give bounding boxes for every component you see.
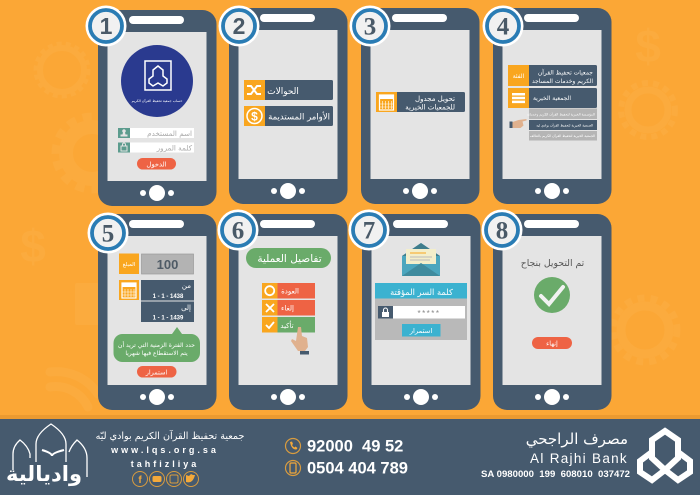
charity logo: واديالية [6,462,82,486]
badge 4: 4 [497,14,510,40]
amount row: 100 [157,257,178,272]
phone 3: scheduled transfer [361,8,480,204]
transfers menu item: الحوالات [267,87,299,97]
charity logo [6,424,87,486]
badge 7 [348,210,390,250]
badge 3: 3 [364,14,376,40]
password field: كلمة المرور [156,144,193,152]
badge 5 [88,212,128,254]
badge 7: 7 [363,218,375,244]
phone 1: login [98,10,216,206]
category row [508,65,597,86]
bank name and IBAN: Al Rajhi Bank [530,451,628,466]
phone numbers: 0504 404 789 [307,460,408,478]
badge 1 [86,6,126,46]
finish button [532,337,572,349]
OTP header [375,283,467,298]
charity name and handles: جمعية تحفيظ القرآن الكريم بوادي ليّه [96,429,244,442]
infographic canvas: $ [20,220,46,272]
social icons: f [138,475,142,486]
footer band [0,419,700,495]
bank logo circle: حساب جمعية تحفيظ القرآن الكريم [132,99,182,103]
phone 7: one-time password [362,214,480,410]
charity options list [527,108,597,140]
confirm option [262,317,315,332]
badge 6: 6 [232,218,244,244]
username field [118,128,194,138]
date range: 1 - 1 - 1438 [153,294,184,300]
bank name and IBAN [481,430,630,480]
login button: الدخول [146,160,167,168]
charity options list: الجمعية الخيرية لتحفيظ القرآن الكريم بالطائف [530,134,595,138]
details heading pill [246,248,331,268]
hint bubble: يتم الاستقطاع فيها شهريا [125,350,188,357]
standing orders menu item [244,106,333,126]
badge 5: 5 [102,220,114,248]
password field [118,142,194,152]
details heading pill: تفاصيل العملية [257,253,322,265]
date range: 1 - 1 - 1439 [153,316,184,322]
success message: تم التحويل بنجاح [521,258,585,269]
envelope icon [402,243,440,276]
continue button: استمرار [145,368,167,376]
badge 2: 2 [233,13,245,39]
OTP form panel: ***** [417,309,441,318]
tapping hand icon [291,327,309,354]
bank logo circle [121,45,193,117]
amount row [119,254,194,274]
category row: الكريم وخدمات المساجد [532,78,593,85]
standing orders menu item: الأوامر المستديمة [268,112,330,122]
social icons [132,472,198,486]
finish button: إنهاء [546,340,558,348]
charity options list: المؤسسة الخيرية لتحفيظ القرآن الكريم وخدماته [527,112,595,116]
charity name and handles: tahfizliya [131,459,199,469]
login button [137,158,176,170]
scheduled transfer item: للجمعيات الخيرية [405,104,455,112]
transfers menu item [244,80,333,100]
charity options list: الجمعية الخيرية لتحفيظ القرآن بوادي ليه [536,124,593,128]
standing orders menu item: $ [251,110,258,124]
phone numbers: 92000 49 52 [307,438,403,456]
back option: العودة [281,288,299,296]
username field: اسم المستخدم [147,129,192,138]
phone 4: charity selection [493,8,612,204]
Al Rajhi Bank logo [640,431,690,480]
charity name and handles [96,429,244,469]
hint bubble [114,327,200,362]
success check icon [534,277,570,313]
hint bubble: حدد الفترة الزمنية التي تريد أن [118,341,195,349]
badge 8: 8 [496,218,508,244]
confirm option: تأكيد [280,320,294,330]
badge 8 [482,210,522,250]
OTP header: كلمة السر المؤقتة [390,287,453,297]
scheduled transfer item: تحويل مجدول [415,95,455,103]
phone 8: success [493,214,612,410]
date range: إلى [181,304,191,312]
date range [119,280,194,322]
badge 3 [350,6,390,46]
continue button [137,366,176,378]
scheduled transfer item [376,92,465,112]
pointing hand icon [510,119,526,128]
badge 2 [218,6,260,46]
amount row: المبلغ [123,262,136,268]
cancel option [262,300,315,316]
phone 5: amount and period [98,214,216,410]
phone numbers [286,438,408,478]
badge 6 [218,210,258,250]
OTP form panel: استمرار [409,327,432,335]
decorative background icons [36,44,677,407]
bank name and IBAN: مصرف الراجحي [526,430,628,449]
infographic canvas: $ [635,20,661,72]
charity row: الجمعية الخيرية [533,95,571,102]
category row: الفئة [513,73,525,80]
badge 1: 1 [100,13,113,39]
OTP form panel [375,298,467,340]
charity name and handles: www.lqs.org.sa [110,445,219,455]
date range: من [182,282,191,290]
badge 4 [482,6,524,46]
phone 2: transfers [229,8,348,204]
cancel option: إلغاء [281,304,294,312]
charity row [508,88,597,108]
category row: جمعيات تحفيظ القرآن [538,68,593,76]
back option [262,283,315,298]
phone 6: operation details [229,214,348,410]
bank name and IBAN: SA 0980000 199 608010 037472 [481,469,630,480]
